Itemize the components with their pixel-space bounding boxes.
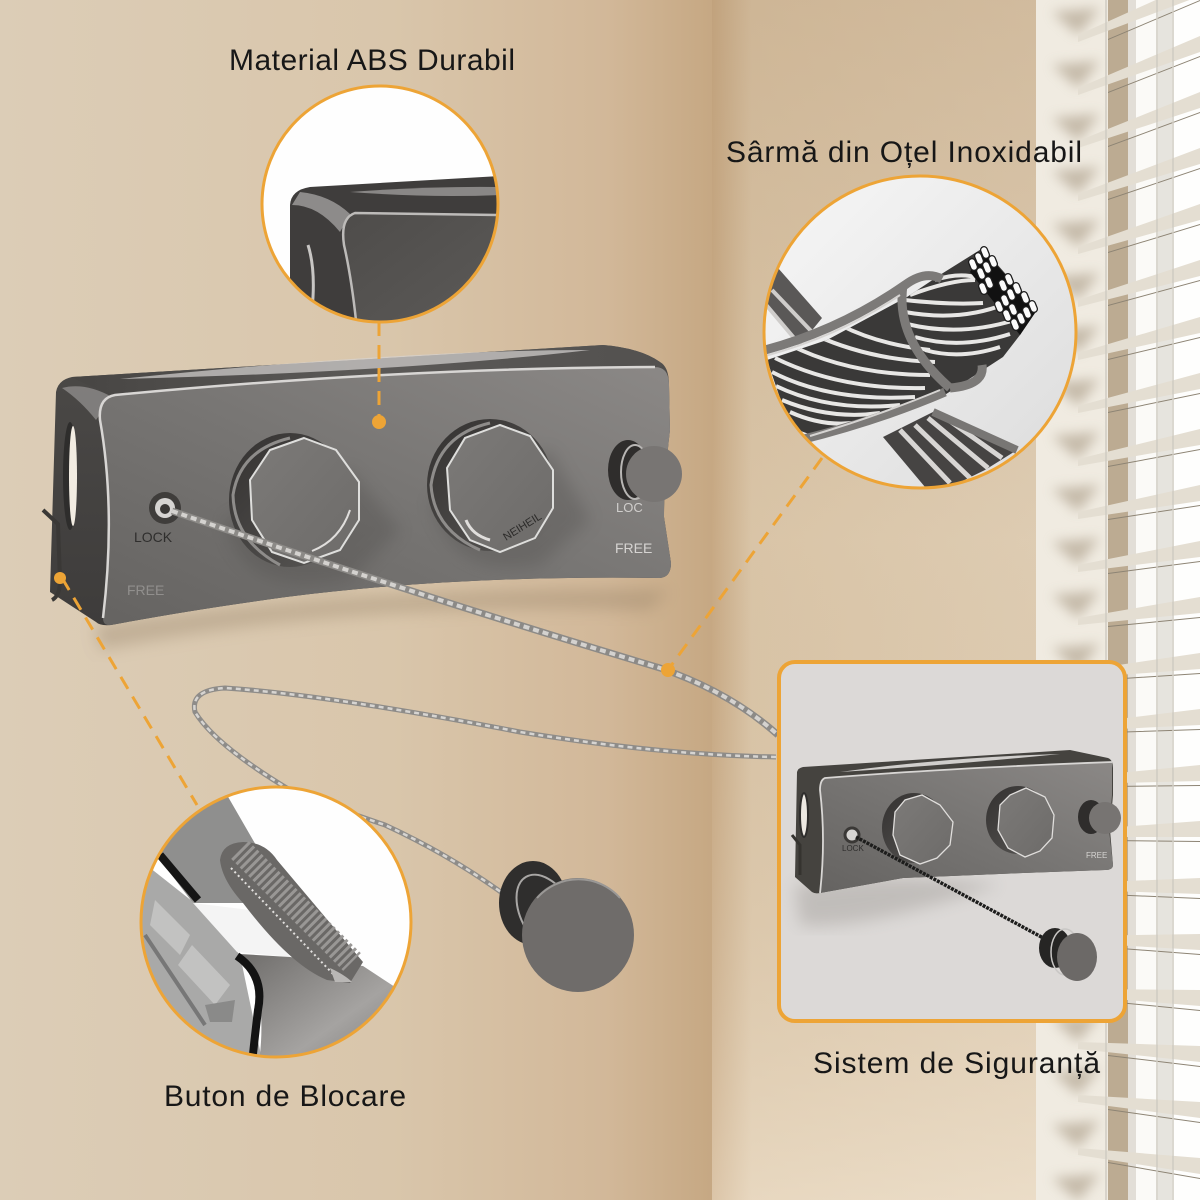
inset end knob (1039, 928, 1097, 981)
loop band (765, 276, 982, 440)
knob left (229, 433, 359, 567)
knob right cap (608, 440, 682, 502)
cable eyelet (149, 492, 181, 524)
wire ends (970, 258, 1036, 335)
callout circle: stainless steel wire (760, 176, 1076, 488)
knob middle (427, 419, 553, 552)
grey frame (160, 797, 255, 903)
inset device: FREE (1086, 851, 1107, 860)
device: main retractable clothesline unit (43, 345, 682, 625)
device shadow on wall (95, 589, 668, 650)
device labels: LOCK (134, 529, 173, 545)
inset device shadow (795, 878, 1000, 926)
top band with highlight (72, 345, 662, 395)
serrated button (220, 842, 363, 983)
label: Buton de Blocare: Buton de Blocare (164, 1080, 406, 1113)
lower metal body (241, 954, 394, 1056)
device body silhouette (50, 345, 671, 625)
label: Sistem de Siguranță: Sistem de Siguranță (813, 1047, 1100, 1080)
rope strands (772, 275, 1015, 424)
label: Material ABS Durabil: Material ABS Durabil (229, 44, 515, 77)
device labels (127, 500, 652, 598)
rear wire pieces (768, 269, 822, 344)
knob shadows (225, 450, 590, 584)
black slot (160, 855, 198, 900)
dashed connector lines (62, 322, 822, 805)
detached end knob (499, 861, 634, 992)
inset device (792, 750, 1121, 893)
connector dots (54, 415, 675, 677)
front face (100, 367, 671, 625)
inset device: LOCK (842, 844, 864, 853)
callout circle: ABS material (262, 86, 500, 330)
device labels: FREE (127, 582, 164, 598)
callout circle: lock button (140, 787, 411, 1070)
white strip (193, 903, 290, 957)
label: Sârmă din Oțel Inoxidabil: Sârmă din Oțel Inoxidabil (726, 136, 1082, 169)
main rope (767, 248, 1037, 437)
inset panel: safety system (779, 662, 1125, 1021)
inset cable (856, 837, 1047, 940)
device labels: FREE (615, 540, 652, 556)
cable (172, 511, 778, 895)
knob middle: NEIHEIL (501, 511, 544, 544)
lock clip (43, 510, 60, 600)
side opening (63, 422, 77, 530)
device labels: LOC (616, 500, 643, 515)
